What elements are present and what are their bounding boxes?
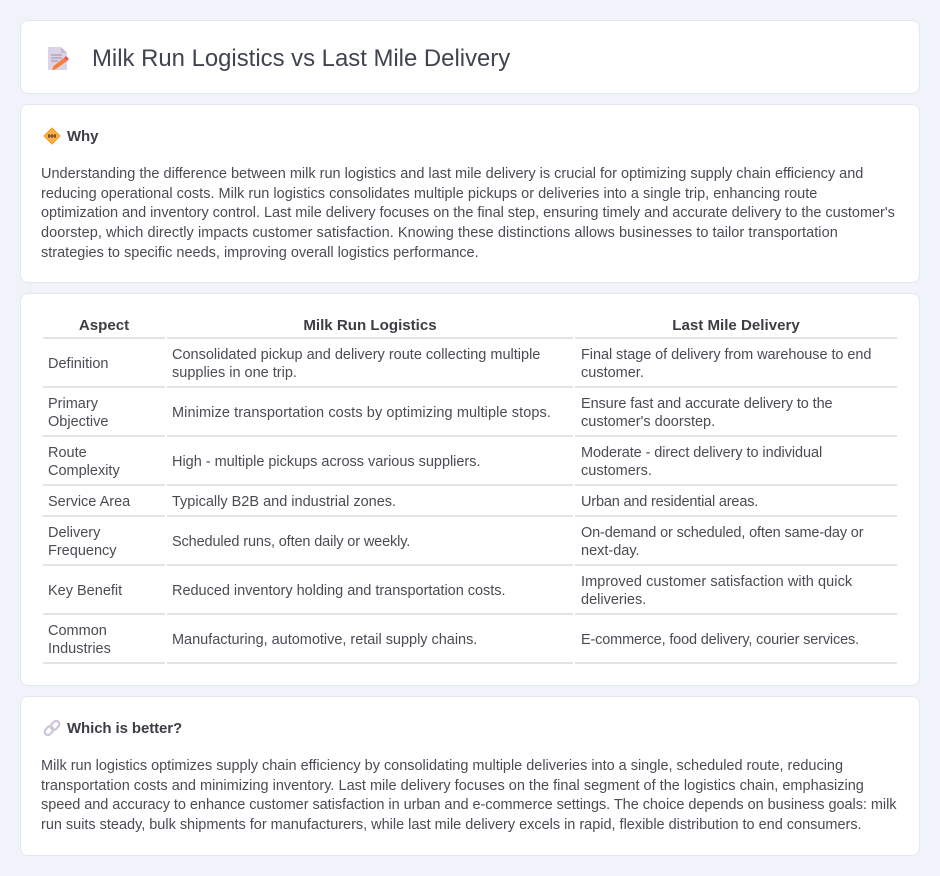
panel: which is better — [20, 696, 920, 856]
icon: warning diamond — [44, 128, 60, 144]
table rows: customer. — [581, 365, 644, 381]
table rows: deliveries. — [581, 592, 646, 608]
panel: comparison table — [20, 293, 920, 686]
table rows: Reduced inventory holding and transportation costs. — [172, 583, 506, 599]
table header: Aspect — [79, 317, 129, 334]
icon: link — [44, 720, 60, 736]
text block: which is better: transportation costs and minimizing inventory. Last mile delivery focuses on the final segment of the logistics chain, emphasizing — [41, 778, 864, 794]
table rows: Route — [48, 445, 87, 461]
text block: why: Understanding the difference between milk run logistics and last mile delivery is crucial for optimizing supply chain efficiency and — [41, 166, 863, 182]
table header: Milk Run Logistics — [303, 317, 437, 334]
table rows: Moderate - direct delivery to individual — [581, 445, 822, 461]
text block: why: strategies to specific needs, improving overall logistics performance. — [41, 245, 479, 261]
text block: which is better — [41, 758, 896, 833]
text block: which is better: Milk run logistics optimizes supply chain efficiency by consolidating multiple deliveries into a single, scheduled route, reducing — [41, 758, 843, 774]
text block: why: reducing operational costs. Milk run logistics consolidates multiple pickups or deliveries into a single trip, enhancing route — [41, 186, 817, 202]
table rows: High - multiple pickups across various suppliers. — [172, 454, 480, 470]
table rows: next-day. — [581, 543, 640, 559]
table rows: Consolidated pickup and delivery route collecting multiple — [172, 347, 540, 363]
table rows: Improved customer satisfaction with quick — [581, 574, 852, 590]
table rows: Definition — [48, 356, 108, 372]
heading: why: Why — [67, 128, 98, 145]
table rows: Final stage of delivery from warehouse to end — [581, 347, 871, 363]
text block: why: optimization and inventory control. Last mile delivery focuses on the final step, ensuring timely and accurate delivery to the customer's — [41, 205, 895, 221]
panel: why — [20, 104, 920, 283]
table rows: On-demand or scheduled, often same-day or — [581, 525, 863, 541]
table rows: Service Area — [48, 494, 130, 510]
table rows: E-commerce, food delivery, courier services. — [581, 632, 859, 648]
table rows — [43, 337, 897, 664]
heading: which is better: Which is better? — [67, 720, 182, 737]
title: Milk Run Logistics vs Last Mile Delivery — [92, 45, 510, 72]
table rows: Industries — [48, 641, 111, 657]
table rows: Delivery — [48, 525, 100, 541]
table rows: Key Benefit — [48, 583, 122, 599]
table rows: Complexity — [48, 463, 120, 479]
table rows: Objective — [48, 414, 108, 430]
table rows: Urban and residential areas. — [581, 494, 758, 510]
table rows: Typically B2B and industrial zones. — [172, 494, 396, 510]
table rows: customers. — [581, 463, 652, 479]
table rows: Ensure fast and accurate delivery to the — [581, 396, 833, 412]
table header — [79, 317, 800, 334]
table rows: Common — [48, 623, 107, 639]
table rows: Minimize transportation costs by optimizing multiple stops. — [172, 405, 551, 421]
table rows: Frequency — [48, 543, 117, 559]
table rows: supplies in one trip. — [172, 365, 297, 381]
text block: why — [41, 166, 895, 261]
table rows: Primary — [48, 396, 98, 412]
icon: document with pencil — [48, 47, 69, 70]
text block: which is better: speed and accuracy to enhance customer satisfaction in urban and e-commerce settings. The choice depends on business goals: milk — [41, 797, 896, 813]
table rows: customer's doorstep. — [581, 414, 715, 430]
table rows: Manufacturing, automotive, retail supply chains. — [172, 632, 477, 648]
panel: header — [20, 20, 920, 94]
text block: which is better: run suits steady, bulk shipments for manufacturers, while last mile delivery excels in rapid, flexible distribution to end consumers. — [41, 817, 862, 833]
table header: Last Mile Delivery — [672, 317, 800, 334]
text block: why: doorstep, which directly impacts customer satisfaction. Knowing these distinctions allows businesses to tailor transportation — [41, 225, 838, 241]
table rows: Scheduled runs, often daily or weekly. — [172, 534, 410, 550]
